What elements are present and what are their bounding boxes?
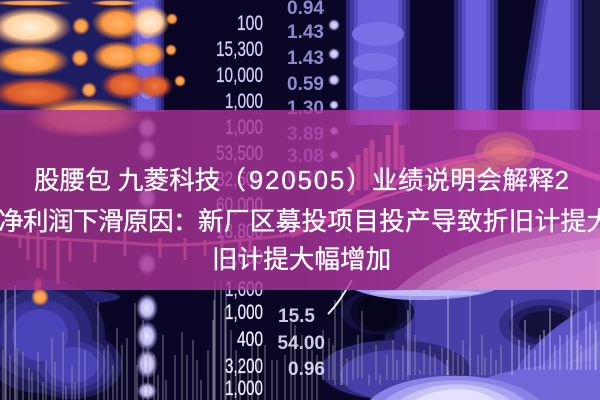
banner overlay [0, 110, 600, 290]
price numbers column: 2,000 [225, 246, 263, 269]
orange line and candlestick glow [0, 122, 600, 314]
price numbers column: 10,000 [216, 64, 263, 87]
change numbers column: 1.43 [287, 48, 324, 69]
change numbers column [277, 0, 325, 380]
bar chart: volume bars [3, 280, 596, 400]
change numbers column: 15.5 [278, 306, 315, 327]
change numbers column: 3.89 [287, 124, 324, 145]
dot column [136, 19, 340, 400]
title line 1: 股腰包 九菱科技（920505）业绩说明会解释2 [34, 167, 569, 195]
price numbers column: 1,000 [225, 301, 263, 324]
change numbers column: 1.30 [287, 98, 324, 119]
lumpy highlights [139, 13, 404, 99]
price numbers column: 53,500 [216, 142, 263, 165]
price numbers column: 400 [237, 328, 263, 351]
price numbers column [216, 12, 263, 400]
price numbers column: 1,000 [225, 90, 263, 113]
price numbers column: 3,200 [225, 355, 263, 378]
change numbers column: 0.59 [287, 74, 324, 95]
change numbers column: 0.96 [288, 359, 325, 380]
price numbers column: 60,000 [216, 194, 263, 217]
price numbers column: 82,500 [216, 168, 263, 191]
change numbers column: 0.37 [287, 168, 324, 189]
price numbers column: 18,800 [216, 220, 263, 243]
change numbers column: 3.08 [287, 146, 324, 167]
price numbers column: 100 [237, 12, 263, 35]
title line 2: 净利润下滑原因：新厂区募投项目投产导致折旧计提大 [0, 208, 600, 236]
lower right glow [320, 290, 600, 400]
price numbers column: 1,000 [225, 377, 263, 400]
change numbers column: 54.00 [277, 333, 325, 354]
purple light columns, soft steps [128, 0, 600, 130]
lower left glow [0, 277, 122, 399]
title line 3: 旧计提大幅增加 [212, 246, 391, 274]
price numbers column: 15,300 [216, 38, 263, 61]
navy panel behind ticker [0, 0, 135, 115]
price numbers column: 1,000 [225, 116, 263, 139]
change numbers column: 1.43 [287, 22, 324, 43]
blurred orange ticker text [0, 0, 186, 306]
price numbers column: 1,600 [225, 278, 263, 301]
title block [0, 166, 600, 274]
